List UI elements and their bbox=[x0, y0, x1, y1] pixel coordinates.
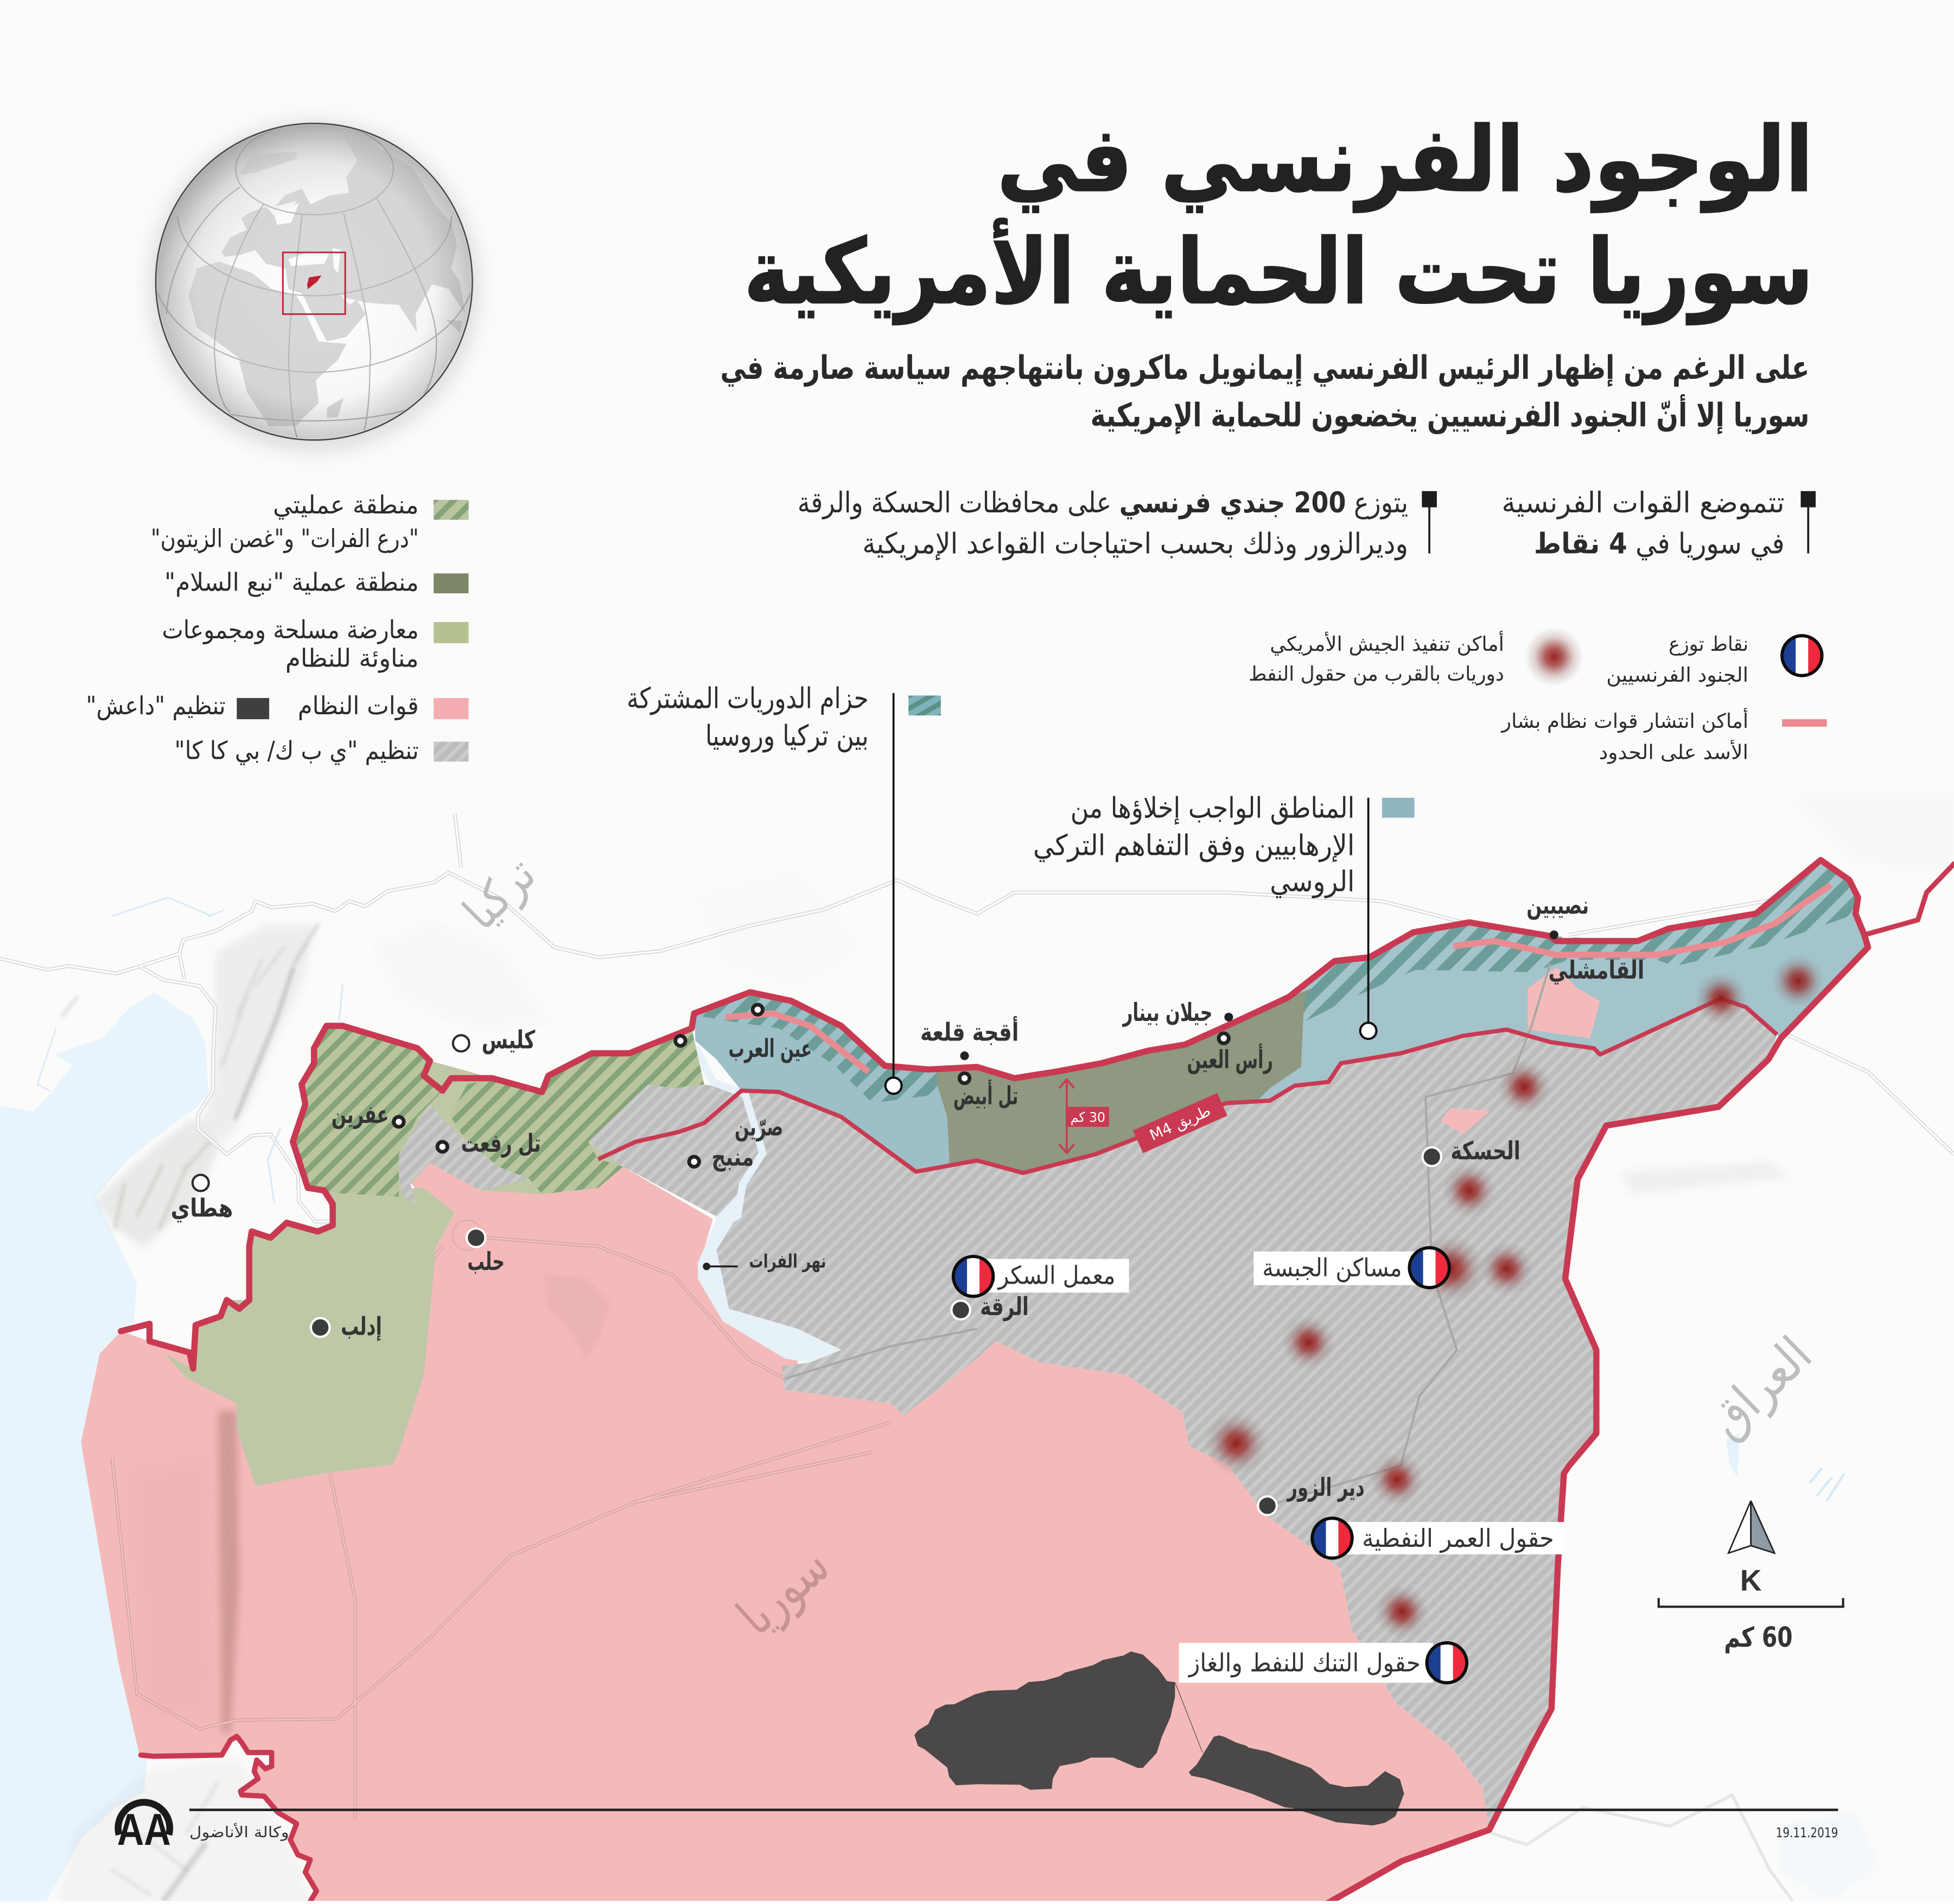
city labels: صرّين bbox=[735, 1112, 783, 1141]
roads in regime area bbox=[112, 1220, 891, 1820]
site: Mabruka/Jibsa bbox=[1253, 1248, 1449, 1287]
mountain shading in regime area bbox=[131, 1274, 610, 1732]
map key: markers bbox=[1249, 627, 1827, 764]
key fact: 200 French soldiers bbox=[798, 486, 1437, 561]
map key: markers: أماكن تنفيذ الجيش الأمريكي bbox=[1270, 631, 1504, 656]
city labels bbox=[171, 890, 1644, 1502]
legend: territories bbox=[86, 490, 469, 766]
site: Mabruka/Jibsa: مساكن الجبسة bbox=[1262, 1253, 1402, 1283]
legend: territories: تنظيم "ي ب ك/ بي كا كا" bbox=[175, 736, 419, 766]
regime pocket Hasakah bbox=[1441, 1108, 1491, 1134]
northern strip base bbox=[311, 1026, 704, 1197]
terrain shading bbox=[56, 798, 1954, 1903]
legend: territories: منطقة عمليتي bbox=[273, 490, 419, 520]
callout: zones to be cleared bbox=[1033, 792, 1415, 1039]
legend: territories: منطقة عملية "نبع السلام" bbox=[164, 568, 419, 597]
city labels: الحسكة bbox=[1450, 1136, 1520, 1165]
callout: joint patrol belt bbox=[627, 682, 941, 1094]
country label: Iraq: العراق bbox=[1697, 1325, 1823, 1450]
city labels: تل أبيض bbox=[953, 1080, 1018, 1110]
Syria border bbox=[121, 860, 1954, 1903]
city labels: جيلان بينار bbox=[1122, 998, 1213, 1027]
north arrow and scale: K bbox=[1740, 1563, 1762, 1597]
city labels: أقجة قلعة bbox=[920, 1016, 1019, 1047]
Kobani safe zone bbox=[694, 992, 950, 1172]
north arrow and scale bbox=[1659, 1501, 1843, 1654]
YPG-held territory bbox=[588, 999, 1777, 1830]
legend: territories: معارضة مسلحة ومجموعات bbox=[162, 615, 419, 645]
bottom margin bbox=[0, 1901, 1954, 1904]
site: sugar factory bbox=[953, 1256, 1129, 1296]
joint patrol belt hatch bbox=[698, 860, 1858, 1103]
city labels: كليس bbox=[482, 1025, 536, 1054]
callout: zones to be cleared: المناطق الواجب إخلاؤها من bbox=[1071, 792, 1354, 825]
city labels: رأس العين bbox=[1187, 1043, 1273, 1074]
city labels: عين العرب bbox=[728, 1033, 812, 1063]
key fact: four French positions bbox=[1501, 486, 1816, 561]
graticule bbox=[157, 123, 472, 440]
city labels: نصيبين bbox=[1526, 890, 1589, 919]
legend: territories: "درع الفرات" و"غصن الزيتون" bbox=[151, 524, 419, 554]
site: Omar oil fields bbox=[1312, 1518, 1564, 1558]
30 km distance marker bbox=[1059, 1080, 1109, 1153]
eastern safe zone bbox=[1257, 860, 1868, 1101]
city labels: هطاي bbox=[171, 1193, 233, 1222]
city labels: منبج bbox=[711, 1142, 754, 1171]
ISIS pocket west bbox=[914, 1652, 1175, 1790]
title: الوجود الفرنسي في bbox=[997, 107, 1813, 213]
Olive Branch zone bbox=[293, 1026, 442, 1197]
subtitle bbox=[720, 350, 1810, 435]
locator square bbox=[283, 252, 345, 314]
city labels: الرقة bbox=[980, 1292, 1029, 1321]
site: Tanak oil and gas fields bbox=[1179, 1643, 1467, 1683]
callout: zones to be cleared: الإرهابيين وفق التفاهم التركي bbox=[1033, 829, 1354, 862]
map key: markers: نقاط توزع bbox=[1669, 632, 1748, 656]
ISIS pocket east bbox=[1189, 1735, 1404, 1825]
legend: territories: تنظيم "داعش" bbox=[86, 691, 226, 720]
city labels: إدلب bbox=[341, 1312, 382, 1342]
Euphrates lake and river bbox=[695, 1047, 841, 1362]
agency name: وكالة الأناضول bbox=[189, 1823, 289, 1841]
callout: joint patrol belt: حزام الدوريات المشتركة bbox=[627, 682, 869, 715]
site: sugar factory: معمل السكر bbox=[997, 1260, 1115, 1290]
Syria highlight bbox=[307, 276, 322, 289]
key fact: 200 French soldiers: وديرالزور وذلك بحسب احتياجات القواعد الإمريكية bbox=[862, 528, 1408, 561]
city labels: عفرين bbox=[332, 1100, 389, 1129]
key fact: four French positions: في سوريا في 4 نقاط bbox=[1534, 528, 1785, 561]
Peace Spring zone bbox=[937, 985, 1322, 1173]
map key: markers: الأسد على الحدود bbox=[1599, 740, 1748, 764]
date: 19.11.2019 bbox=[1776, 1825, 1838, 1840]
site: Omar oil fields: حقول العمر النفطية bbox=[1362, 1524, 1554, 1553]
callout: zones to be cleared: الروسي bbox=[1270, 865, 1354, 898]
Idlib opposition territory bbox=[164, 1188, 455, 1486]
key fact: 200 French soldiers: يتوزع 200 جندي فرنسي على محافظات الحسكة والرقة bbox=[798, 486, 1408, 519]
title: سوريا تحت الحماية الأمريكية bbox=[744, 218, 1813, 325]
regime deployment lines bbox=[725, 885, 1831, 1072]
city labels: القامشلي bbox=[1548, 955, 1644, 985]
legend: territories: قوات النظام bbox=[298, 691, 419, 721]
map key: markers: أماكن انتشار قوات نظام بشار bbox=[1500, 708, 1748, 733]
callout: joint patrol belt: بين تركيا وروسيا bbox=[705, 719, 869, 752]
city labels: حلب bbox=[467, 1247, 505, 1276]
Anadolu Agency logo: AA bbox=[117, 1804, 171, 1855]
Tal Rifaat pocket bbox=[399, 1105, 530, 1204]
key fact: four French positions: تتموضع القوات الفرنسية bbox=[1501, 486, 1785, 519]
30 km distance marker: 30 كم bbox=[1071, 1109, 1105, 1126]
city labels: تل رفعت bbox=[461, 1128, 541, 1158]
M4 road label bbox=[1133, 1093, 1227, 1153]
sea bbox=[0, 992, 208, 1903]
title bbox=[744, 107, 1813, 325]
country label: Turkey: تركيا bbox=[453, 847, 546, 940]
regime pocket Qamishli bbox=[1528, 967, 1600, 1038]
US patrol markers bbox=[1204, 954, 1825, 1639]
footer rule bbox=[189, 1810, 1838, 1811]
base map bbox=[0, 798, 1954, 1904]
map key: markers: الجنود الفرنسيين bbox=[1606, 663, 1748, 687]
city markers bbox=[193, 930, 1558, 1515]
country label: Syria: سوريا bbox=[725, 1534, 841, 1647]
legend: territories: مناوئة للنظام bbox=[285, 644, 419, 674]
map key: markers: دوريات بالقرب من حقول النفط bbox=[1249, 662, 1504, 686]
city labels: دير الزور bbox=[1287, 1473, 1365, 1502]
M4 road label: طريق M4 bbox=[1147, 1102, 1213, 1144]
regime-held territory bbox=[81, 1163, 1489, 1903]
north arrow and scale: 60 كم bbox=[1724, 1621, 1793, 1654]
globe landmasses bbox=[157, 123, 472, 440]
locator globe bbox=[150, 122, 479, 451]
safe zone limit line bbox=[598, 999, 1777, 1173]
regional roads bbox=[0, 814, 1954, 1903]
Euphrates Shield zone bbox=[450, 1029, 704, 1194]
site: Tanak oil and gas fields: حقول التنك للنفط والغاز bbox=[1188, 1648, 1421, 1678]
city labels: نهر الفرات bbox=[749, 1251, 826, 1273]
eastern roads bbox=[785, 963, 1550, 1506]
